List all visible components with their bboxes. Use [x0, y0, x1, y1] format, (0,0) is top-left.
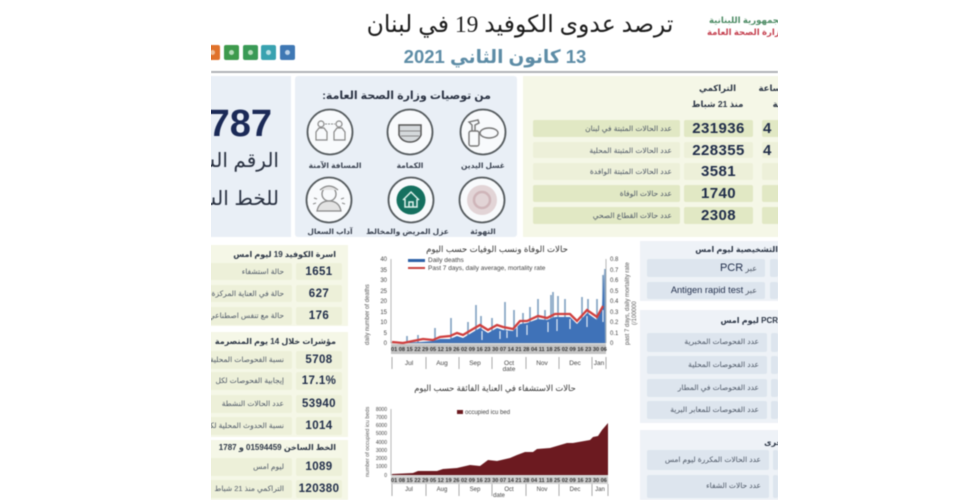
ministry name: وزارة الصحة العامة	[707, 27, 785, 37]
chart title: حالات الوفاة ونسب الوفيات حسب اليوم	[426, 244, 568, 254]
row: lab tests: عدد الفحوصات المخبرية	[684, 337, 759, 346]
panel: ministry recommendations	[295, 76, 517, 237]
label: mask: الكمامة	[397, 161, 423, 170]
right axis labels: 0.8	[610, 257, 619, 263]
row: yesterday: ليوم امس	[253, 462, 284, 471]
right axis labels: 0.6	[610, 278, 619, 284]
month labels	[405, 487, 605, 499]
panel: hotline calls	[205, 440, 348, 500]
row: local tests	[647, 356, 778, 374]
row: cumulative: التراكمي منذ 21 شباط	[214, 484, 284, 493]
month labels: Oct	[504, 487, 514, 493]
legend: Daily deaths	[428, 257, 465, 264]
chart title: حالات الاستشفاء في العناية الفائقة حسب اليوم	[414, 383, 576, 393]
row: recoveries	[647, 475, 778, 498]
row: ICU cases	[211, 285, 342, 302]
label: isolation: عزل المريض والمخالط	[366, 227, 449, 236]
row: local incidence: نسبة الحدوث المحلية لكل	[204, 421, 284, 430]
date ticks band: 01 08 15 22 29 05 12 19 26 02 09 16 23 30 07 14 21 28 04 11 18 25 02 09 16 23 30 06	[391, 347, 607, 353]
column header: last 24 hours	[758, 84, 778, 108]
row: PCR	[647, 259, 778, 277]
heading: PCR tests: PCR ليوم امس	[720, 316, 778, 325]
y axis titles: past 7 days, daily mortality rate	[625, 262, 631, 345]
panel: 14 day indicators	[205, 332, 348, 437]
row: local cases: عدد الحالات المثبتة المحلية	[589, 146, 672, 155]
row: antigen: عبر Antigen rapid test	[671, 285, 757, 295]
y axis labels: 5	[384, 331, 388, 337]
y axis titles: (/100000	[632, 301, 638, 325]
right axis labels	[610, 257, 619, 347]
row: health sector cases: 2308	[701, 207, 736, 224]
y axis labels: 35	[380, 268, 388, 274]
month labels	[405, 360, 605, 373]
right axis labels: 0.5	[610, 289, 619, 295]
row: positivity: إيجابية الفحوصات لكل	[215, 376, 284, 385]
y axis labels: 3000	[376, 448, 387, 454]
row: hospital cases	[211, 263, 342, 280]
column header: last 24 hours: ية	[773, 99, 781, 109]
month labels: Jul	[405, 360, 414, 367]
icon: safe distance	[308, 110, 352, 154]
recommendations heading: من توصيات وزارة الصحة العامة:	[322, 90, 491, 102]
y axis labels: 30	[380, 278, 388, 284]
y axis labels: 0	[384, 341, 388, 347]
y axis labels: 20	[380, 299, 388, 305]
chart: occupied ICU beds	[364, 384, 609, 498]
ministry name	[706, 16, 778, 38]
row: land crossings tests	[647, 401, 778, 419]
row: local cases	[533, 142, 778, 158]
legend	[408, 257, 546, 272]
icon strip: colored squares	[211, 44, 296, 61]
month labels: Jan	[595, 487, 605, 493]
month labels: date	[503, 366, 516, 373]
row: ventilated cases: 176	[309, 310, 329, 322]
icon: home isolation	[388, 178, 434, 222]
date subtitle: 13 كانون الثاني 2021	[404, 46, 586, 67]
title: ترصد عدوى الكوفيد 19 في لبنان	[367, 12, 673, 38]
right axis labels: 0.1	[610, 331, 619, 337]
y axis title: number of occupied icu beds	[365, 406, 371, 477]
label: coughing etiquette: آداب السعال	[307, 227, 353, 236]
month labels: Aug	[437, 487, 447, 493]
row: imported cases: 3581	[701, 163, 736, 180]
row: local incidence	[211, 417, 342, 435]
panel: daily and cumulative cases table	[523, 76, 783, 237]
y axis labels: 15	[380, 310, 388, 316]
row: local tests: عدد الفحوصات المحلية	[688, 360, 759, 369]
row: total cases: 231936	[692, 120, 745, 137]
right axis labels: 0	[610, 341, 614, 347]
row: deaths: عدد حالات الوفاة	[620, 189, 672, 198]
y axis labels: 1000	[376, 464, 387, 470]
row: active cases	[211, 395, 342, 413]
row: total cases: عدد الحالات المثبتة في لبنان	[585, 124, 672, 133]
row: airport tests	[647, 379, 778, 397]
month labels: Sep	[469, 360, 481, 367]
column header: last 24 hours: ساعة	[758, 83, 781, 93]
icon: coughing etiquette	[306, 178, 352, 222]
y axis labels: 10	[380, 320, 388, 326]
column header: cumulative: التراكمي	[699, 83, 736, 93]
row: airport tests: عدد الفحوصات في المطار	[678, 383, 759, 392]
y axis labels	[380, 257, 388, 347]
y axis labels: 4000	[376, 440, 387, 446]
deaths area	[392, 272, 605, 343]
row: hospital cases: 1651	[305, 266, 333, 278]
hotline number: 1787	[187, 103, 272, 145]
y axis labels: 2000	[376, 456, 387, 462]
y axis labels: 0	[384, 473, 387, 479]
row: health sector cases: عدد حالات القطاع الصحي	[593, 211, 672, 220]
y axis labels	[376, 407, 387, 479]
row: imported cases	[533, 163, 778, 180]
heading: beds: اسرة الكوفيد 19 ليوم امس	[233, 250, 336, 259]
month labels: Jan	[594, 360, 605, 367]
row: active cases: عدد الحالات النشطة	[222, 399, 284, 408]
row: test rate: 5708	[305, 354, 333, 366]
heading: diagnostic tests: التشخيصية ليوم امس	[695, 245, 778, 254]
row: cumulative: 120380	[299, 483, 339, 495]
legend: occupied icu bed	[465, 410, 510, 416]
row: PCR: عبر PCR	[720, 262, 757, 274]
row: health sector cases	[532, 206, 778, 224]
row: local cases: 4	[763, 142, 772, 159]
y axis titles: daily number of deaths	[365, 284, 371, 345]
panel: other indicators	[640, 430, 785, 500]
panel: PCR tests yesterday	[640, 310, 785, 423]
ICU area	[392, 423, 608, 475]
y axis labels: 6000	[376, 423, 387, 429]
row: local incidence: 1014	[305, 420, 333, 432]
column header: cumulative: منذ 21 شباط	[692, 99, 743, 109]
icons and labels	[304, 108, 508, 224]
row: ventilated cases: حالة مع تنفس اصطناعي	[209, 311, 284, 320]
row: deaths: 1740	[701, 185, 736, 202]
month labels: Oct	[504, 360, 514, 367]
row: yesterday	[211, 458, 342, 476]
y axis labels: 25	[380, 289, 388, 295]
label: hand washing: غسل اليدين	[461, 161, 505, 170]
row: total cases	[532, 120, 778, 138]
y axis labels: 5000	[376, 431, 387, 437]
label: safe distance: المسافة الآمنة	[309, 161, 361, 170]
month labels: Sep	[470, 487, 481, 493]
month labels: date	[493, 493, 505, 499]
y axis labels: 8000	[376, 407, 387, 413]
ministry name: الجمهورية اللبنانية	[709, 15, 785, 25]
panel: diagnostic tests yesterday	[640, 241, 785, 301]
hotline text: للخط الساخن	[166, 188, 279, 210]
month labels: Dec	[569, 360, 582, 367]
row: yesterday: 1089	[305, 461, 333, 473]
row: deaths	[532, 184, 778, 202]
hotline text: الرقم الساخن	[165, 150, 279, 172]
row: repeated cases	[647, 450, 778, 470]
row: recoveries: عدد حالات الشفاء	[706, 481, 761, 490]
right axis labels: 0.3	[610, 310, 619, 316]
row: repeated cases: عدد الحالات المكررة ليوم امس	[665, 455, 761, 464]
y axis labels: 40	[380, 257, 388, 263]
column header: cumulative	[692, 84, 744, 110]
date ticks band: 01 08 15 22 29 05 12 19 26 02 09 16 23 30 07 14 21 28 04 11 18 25 02 09 16 23 30 06	[391, 478, 607, 484]
row: test rate: نسبة الفحوصات المحلية	[210, 355, 284, 364]
row: imported cases: عدد الحالات المثبتة الوافدة	[590, 167, 672, 176]
row: antigen	[647, 282, 778, 299]
right axis labels: 0.2	[610, 320, 619, 326]
mortality rate line	[392, 306, 603, 343]
row: test rate	[211, 351, 342, 369]
row: positivity: 17.1%	[302, 375, 336, 387]
panel: hotline number	[205, 76, 291, 237]
icon: face mask	[388, 110, 432, 154]
icon: ventilation	[460, 178, 504, 222]
row: hospital cases: حالة استشفاء	[242, 267, 284, 276]
panel: hospital beds yesterday	[205, 245, 348, 326]
icon: hand washing	[460, 110, 506, 154]
row: total cases: 4	[763, 120, 772, 137]
row: positivity	[211, 372, 342, 390]
heading: other: أخرى	[764, 438, 785, 447]
right axis labels: 0.4	[610, 299, 619, 305]
month labels: Nov	[536, 360, 549, 367]
heading: hotline: الخط الساخن 01594459 و 1787	[219, 443, 336, 452]
heading: indicators: مؤشرات خلال 14 يوم المنصرمة	[215, 337, 336, 346]
right axis labels: 0.7	[610, 268, 619, 274]
y axis titles	[365, 262, 638, 345]
row: local cases: 228355	[692, 142, 745, 159]
hotline text	[211, 151, 278, 206]
label: ventilation: التهوئة	[470, 227, 496, 236]
row: active cases: 53940	[302, 398, 336, 410]
month labels: Jul	[405, 487, 413, 493]
row: ICU cases: حالة في العناية المركزة	[212, 289, 284, 298]
month labels: Dec	[570, 487, 580, 493]
row: cumulative	[211, 480, 342, 498]
header rule	[211, 71, 778, 73]
white notches	[482, 310, 603, 340]
month labels: Aug	[436, 360, 448, 367]
row: ICU cases: 627	[309, 288, 329, 300]
row: lab tests	[647, 333, 778, 352]
deaths spikes	[407, 269, 605, 343]
date ticks band	[391, 344, 607, 354]
month labels: Nov	[537, 487, 547, 493]
legend: Past 7 days, daily average, mortality rate	[428, 265, 546, 272]
row: land crossings tests: عدد الفحوصات للمعابر البرية	[670, 405, 759, 414]
row: ventilated cases	[211, 307, 342, 325]
chart: daily deaths and mortality rate	[364, 245, 638, 372]
y axis labels: 7000	[376, 415, 387, 421]
